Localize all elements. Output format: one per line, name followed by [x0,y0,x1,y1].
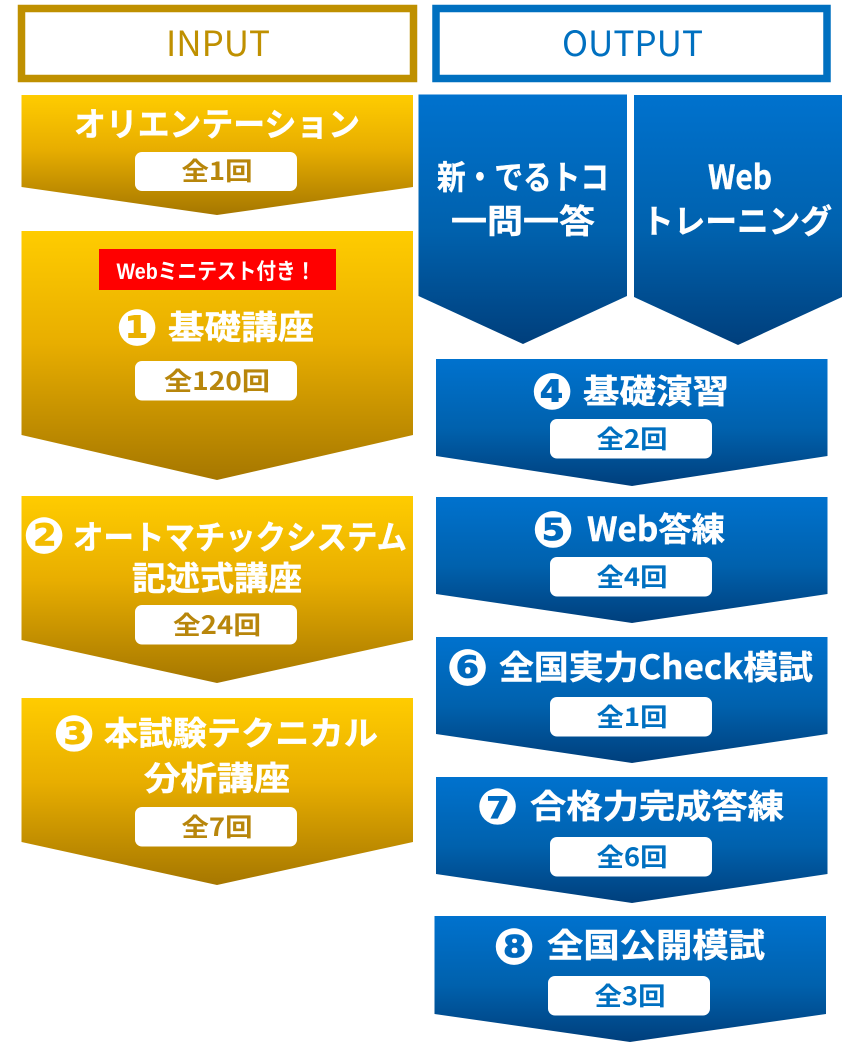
output step 6: national check exam: ❻ [446,639,489,697]
input step 3: exam technical [22,698,413,885]
output step 7: pass-power completion [436,777,828,903]
input step: orientation [22,95,413,215]
output step 6: national check exam: 全1回 [596,698,668,734]
input step 3: exam technical: 全7回 [182,808,252,844]
input step 1: basic course: 基礎講座 [168,301,314,349]
input step 3: exam technical: ❸ [53,705,95,763]
output: one-question drill: 新・でるトコ [437,151,609,199]
output step 6: national check exam: 全国実力Check模試 [499,641,813,689]
output step 8: national open exam [434,916,826,1042]
input step 1: basic course: 全120回 [164,362,270,398]
output step 4: basic practice: 基礎演習 [583,365,729,413]
output step 6: national check exam [436,637,828,763]
badge: web mini test: Webミニテスト付き！ [116,259,316,284]
input step 3: exam technical: 本試験テクニカル [104,707,378,755]
header: INPUT: INPUT [166,16,270,67]
input step 2: automatic system: 記述式講座 [132,552,302,600]
output step 5: web answer practice: 全4回 [596,558,668,594]
header: OUTPUT [436,8,827,78]
output step 8: national open exam: 全国公開模試 [547,919,765,967]
output: web training [634,95,842,345]
output: one-question drill: 一問一答 [451,195,595,243]
badge: web mini test [99,249,336,290]
output step 5: web answer practice: ❺ [532,501,574,559]
input step: orientation: 全1回 [182,152,252,188]
input step 1: basic course [22,231,413,480]
header: OUTPUT: OUTPUT [562,16,703,67]
output step 4: basic practice: 全2回 [596,420,668,456]
output step 5: web answer practice: Web答練 [587,503,725,551]
output step 4: basic practice: ❹ [531,363,573,421]
output step 7: pass-power completion: 合格力完成答練 [530,780,784,828]
input step 2: automatic system: ❷ [23,507,65,565]
input step 2: automatic system: 全24回 [173,606,261,642]
output: one-question drill [418,94,627,344]
input step 2: automatic system: オートマチックシステム [73,511,407,559]
output: web training: トレーニング [642,195,832,243]
output step 5: web answer practice [436,497,828,623]
input step 2: automatic system [22,496,413,683]
output step 7: pass-power completion: ❼ [476,778,519,836]
output: web training: Web [708,151,772,199]
output step 4: basic practice [436,359,828,486]
input step 3: exam technical: 分析講座 [144,752,290,800]
input step 1: basic course: ❶ [116,299,158,357]
output step 8: national open exam: 全3回 [594,977,666,1013]
header: INPUT [22,8,414,78]
output step 7: pass-power completion: 全6回 [596,838,668,874]
output step 8: national open exam: ❽ [493,918,535,976]
input step: orientation: オリエンテーション [74,98,360,146]
